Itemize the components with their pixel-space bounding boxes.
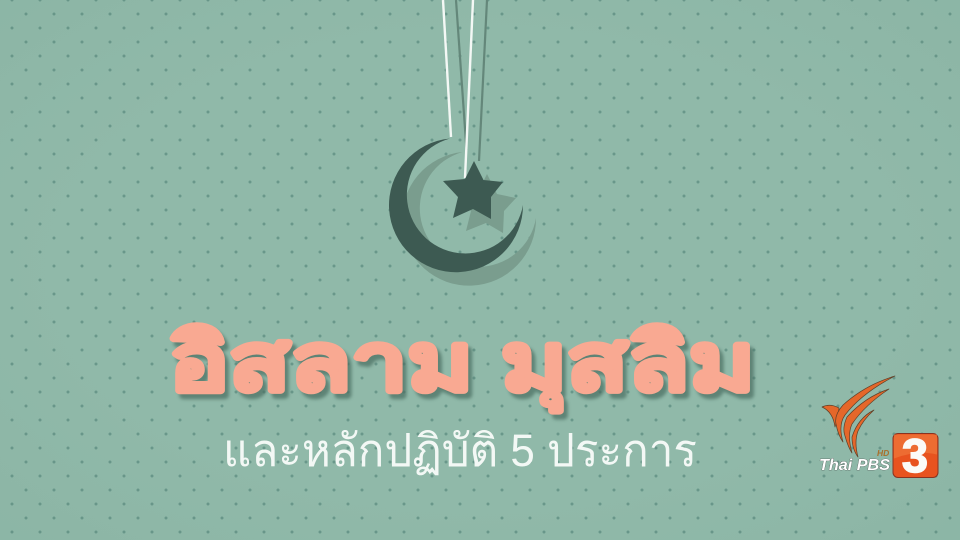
icon: hanging crescent and star	[389, 0, 536, 286]
badge: channel 3: 3	[902, 429, 928, 482]
hanging strings	[443, 0, 487, 178]
title: อิสลาม มุสลิม	[169, 318, 755, 413]
icon: orange bird feathers	[822, 376, 895, 457]
logo: Thai PBS channel 3	[819, 376, 938, 482]
icon: star	[443, 161, 503, 219]
icon: crescent and star shadow	[402, 152, 536, 286]
logo text: Thai PBS: Thai PBS	[819, 457, 891, 474]
icon: crescent	[389, 138, 523, 272]
logo text: HD: HD	[877, 448, 889, 458]
subtitle: และหลักปฏิบัติ 5 ประการ	[223, 425, 697, 476]
title: อิสลาม มุสลิม	[173, 323, 759, 418]
